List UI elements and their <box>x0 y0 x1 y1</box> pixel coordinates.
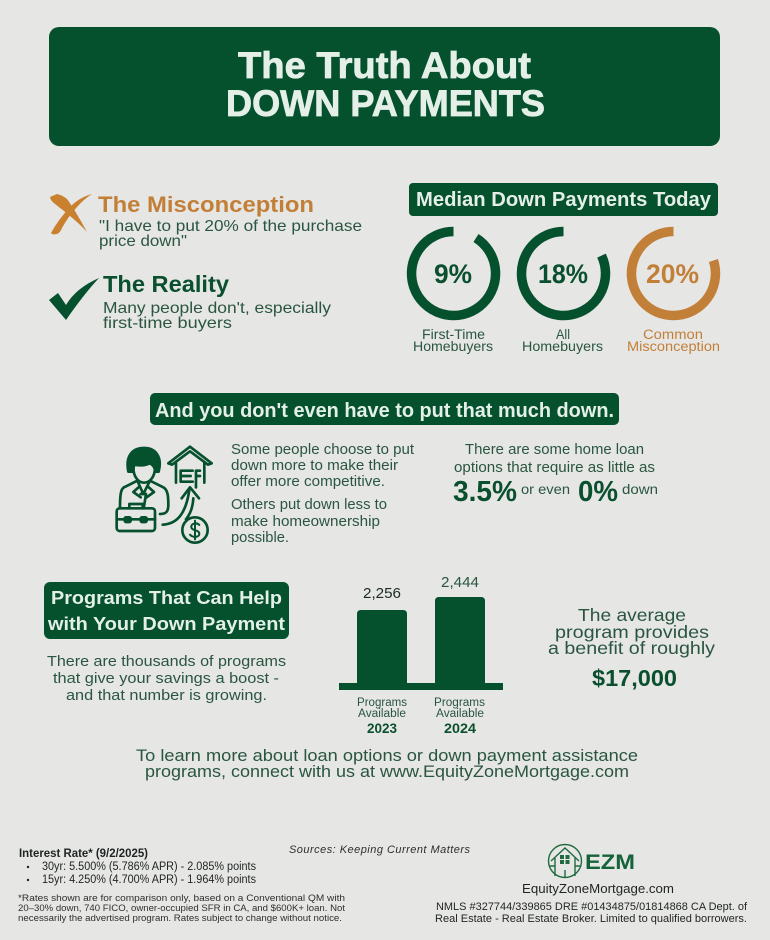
ring: 18 percent all homebuyers: 18% <box>538 259 588 289</box>
text: low down payment options: or even <box>521 481 570 497</box>
text: why people put more or less down: make homeownership <box>231 514 380 530</box>
ring: 20 percent common misconception: 20% <box>646 259 699 289</box>
icon: green check mark <box>49 278 99 320</box>
ring: 18 percent all homebuyers: All <box>556 327 570 342</box>
bar chart: programs available <box>339 574 503 736</box>
rate disclaimer <box>18 893 346 923</box>
heading: programs that can help: Programs That Can Help <box>51 588 282 608</box>
callout: average benefit: a benefit of roughly <box>548 638 715 658</box>
title banner: DOWN PAYMENTS <box>226 83 545 124</box>
text: why people put more or less down: Others put down less to <box>231 497 387 513</box>
ring: 18 percent all homebuyers <box>522 232 606 354</box>
text: thousands of programs: and that number is growing. <box>66 687 267 704</box>
interest rates: Interest Rate* (9/2/2025) <box>19 848 148 860</box>
call to action text: To learn more about loan options or down payment assistance <box>136 746 638 765</box>
reality text: The Reality <box>103 271 229 297</box>
ring: 9 percent first-time homebuyers: First-Time <box>422 327 485 342</box>
ring: 9 percent first-time homebuyers <box>412 232 496 354</box>
title banner <box>49 27 720 146</box>
ring: 20 percent common misconception <box>627 231 720 354</box>
icon: person with briefcase, house and dollar <box>117 447 212 543</box>
reality text: Many people don't, especially <box>103 300 331 317</box>
misconception text: price down" <box>99 233 187 250</box>
text: why people put more or less down <box>231 442 414 546</box>
call to action text <box>136 746 638 781</box>
interest rates: 15yr: 4.250% (4.700% APR) - 1.964% points <box>42 874 256 886</box>
logo: EZM <box>548 844 635 878</box>
text: thousands of programs <box>47 653 286 704</box>
text: low down payment options: 0% <box>578 476 618 508</box>
bar chart: programs available: 2,444 <box>441 574 479 591</box>
bar chart: programs available: Available <box>358 708 406 720</box>
bar chart: programs available: 2023 <box>367 721 397 736</box>
licensing text: NMLS #327744/339865 DRE #01434875/01814868 CA Dept. of <box>436 901 748 913</box>
ring: 9 percent first-time homebuyers: 9% <box>434 259 472 289</box>
heading: programs that can help <box>44 582 289 639</box>
ring: 18 percent all homebuyers: Homebuyers <box>522 339 603 354</box>
text: why people put more or less down: Some people choose to put <box>231 442 414 458</box>
sources: Sources: Keeping Current Matters <box>289 844 470 856</box>
text: why people put more or less down: possible. <box>231 530 289 546</box>
bar chart: programs available: Programs <box>357 697 407 709</box>
ring: 9 percent first-time homebuyers: Homebuyers <box>413 339 493 354</box>
heading: median down payments: Median Down Payments Today <box>416 189 712 211</box>
ring: 20 percent common misconception: Common <box>643 327 703 342</box>
licensing text: Real Estate - Real Estate Broker. Limited to qualified borrowers. <box>435 913 747 925</box>
text: thousands of programs: that give your savings a boost - <box>53 670 279 687</box>
licensing text <box>435 901 748 925</box>
heading: median down payments <box>409 183 718 216</box>
bar chart: programs available: Available <box>436 708 484 720</box>
reality text <box>103 271 331 332</box>
bar chart: programs available: Programs <box>434 697 485 709</box>
misconception text: The Misconception <box>98 192 314 217</box>
callout: average benefit: program provides <box>555 622 709 642</box>
text: low down payment options: options that require as little as <box>454 460 655 476</box>
misconception text <box>98 192 362 250</box>
misconception text: "I have to put 20% of the purchase <box>99 218 362 235</box>
text: why people put more or less down: down more to make their <box>231 458 398 474</box>
logo: EZM: EZM <box>585 851 635 874</box>
title banner: The Truth About <box>238 45 531 86</box>
ring: 20 percent common misconception: Misconception <box>627 339 720 354</box>
heading: you don't have to put that much down <box>150 393 619 425</box>
reality text: first-time buyers <box>103 315 232 332</box>
text: low down payment options: 3.5% <box>453 476 517 508</box>
text: low down payment options <box>453 442 658 508</box>
callout: average benefit: The average <box>578 605 686 625</box>
call to action text: programs, connect with us at www.EquityZoneMortgage.com <box>145 762 629 781</box>
interest rates <box>19 848 256 886</box>
bar chart: programs available: 2,256 <box>363 585 401 602</box>
rate disclaimer: *Rates shown are for comparison only, based on a Conventional QM with <box>18 893 345 903</box>
callout: average benefit: $17,000 <box>592 665 677 691</box>
rate disclaimer: necessarily the advertised program. Rates subject to change without notice. <box>18 913 342 923</box>
website: EquityZoneMortgage.com <box>522 881 674 896</box>
callout: average benefit <box>548 605 715 691</box>
text: why people put more or less down: offer more competitive. <box>231 474 385 490</box>
rate disclaimer: 20–30% down, 740 FICO, owner-occupied SFR in CA, and $600K+ loan. Not <box>18 903 346 913</box>
heading: you don't have to put that much down: And you don't even have to put that much down. <box>155 400 614 422</box>
bar chart: programs available: 2024 <box>444 721 477 736</box>
interest rates: 30yr: 5.500% (5.786% APR) - 2.085% points <box>42 861 256 873</box>
text: thousands of programs: There are thousands of programs <box>47 653 286 670</box>
text: low down payment options: down <box>622 481 658 497</box>
heading: programs that can help: with Your Down Payment <box>47 614 285 634</box>
text: low down payment options: There are some home loan <box>465 442 644 458</box>
icon: orange X <box>50 194 92 234</box>
